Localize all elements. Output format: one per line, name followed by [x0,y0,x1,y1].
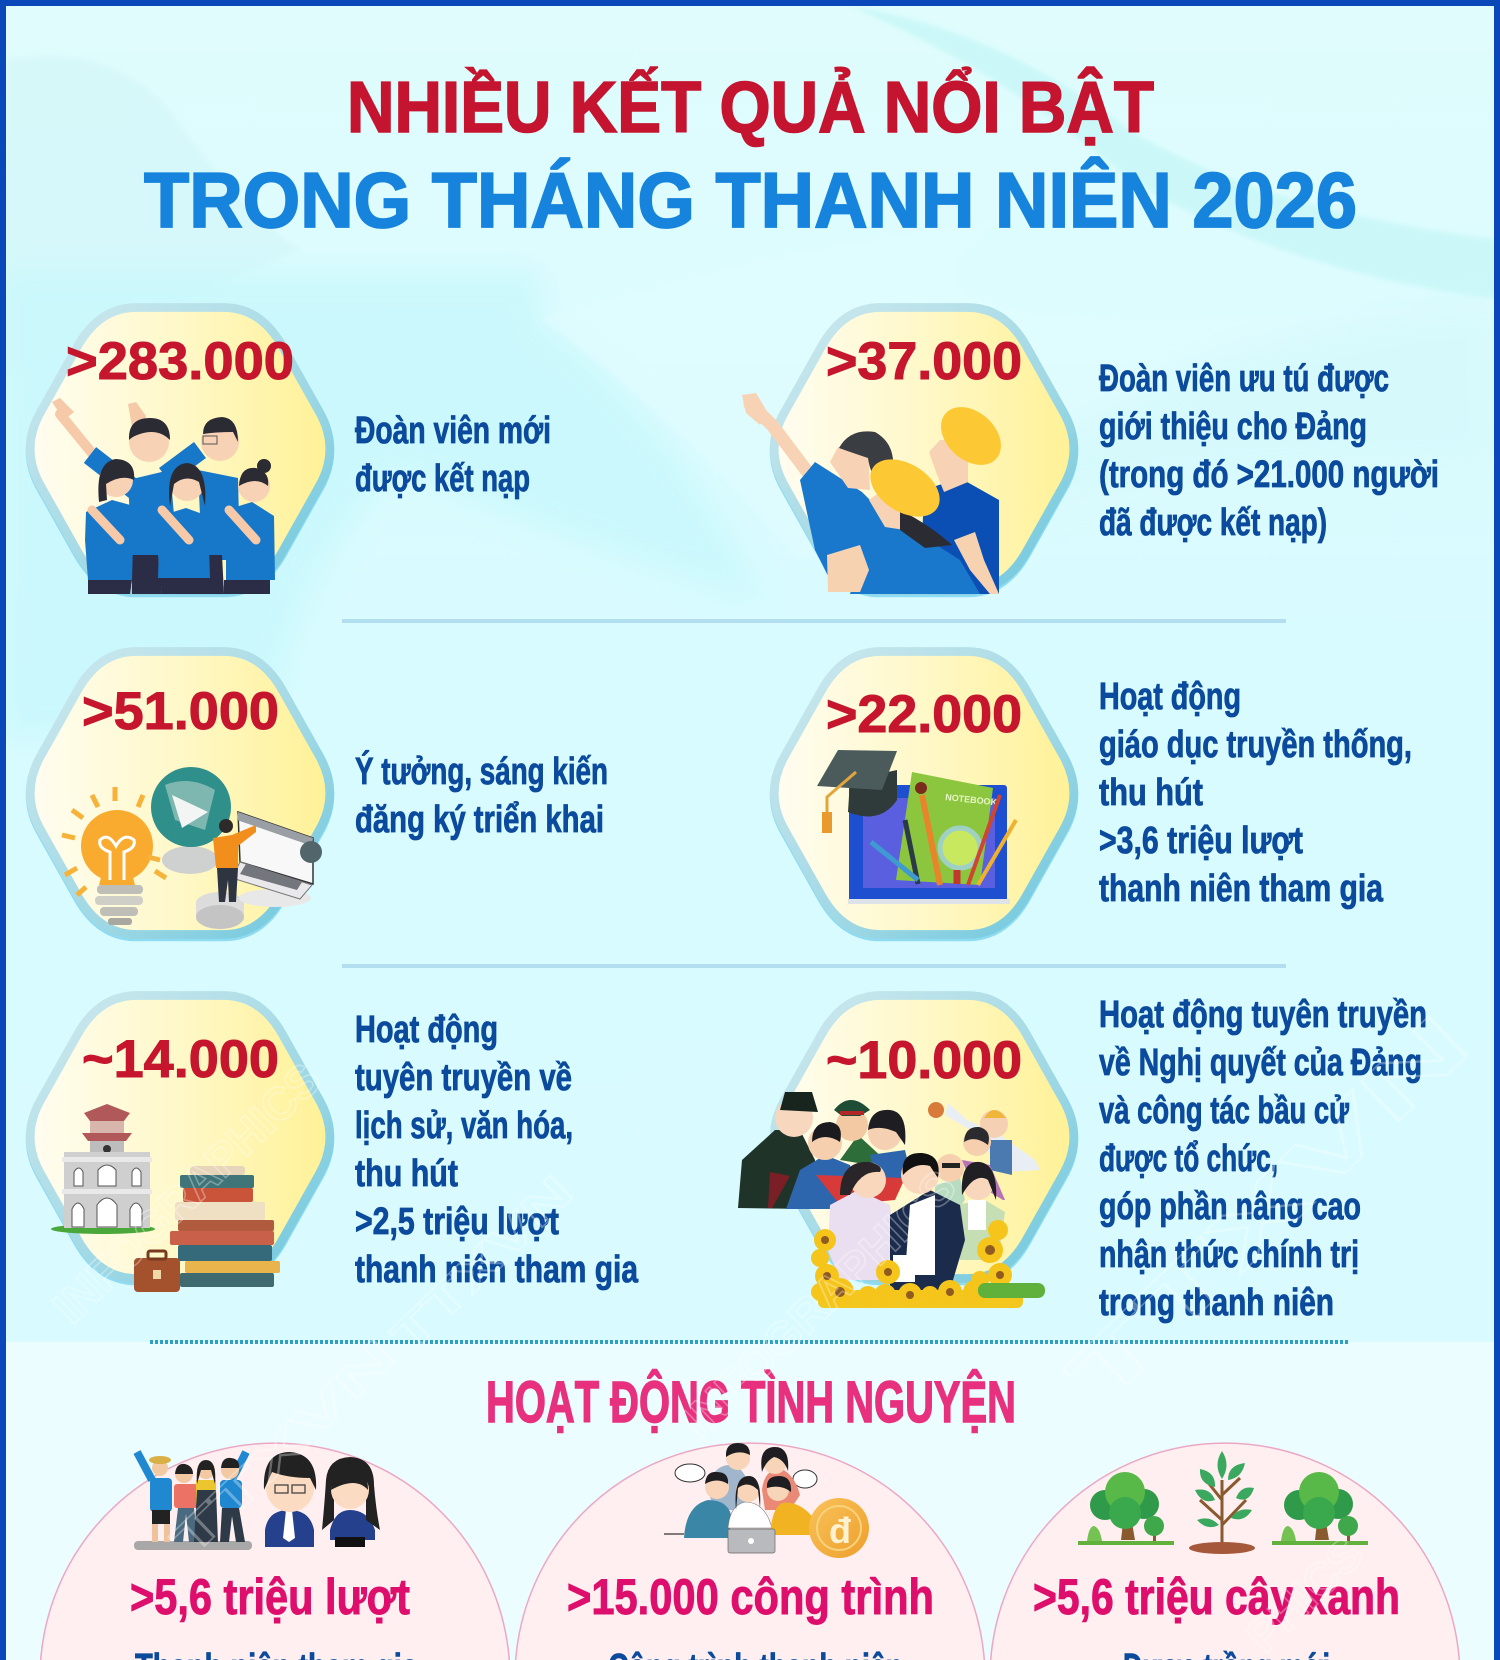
watermark: TTXVN [381,1165,582,1362]
icon: bulb, globe and laptop [62,767,322,929]
label: traditional education: >3,6 triệu lượt [1099,820,1303,862]
watermark: TTXVN [161,1328,406,1567]
label: history and culture: Hoạt động [355,1009,498,1051]
panel: new union members [30,308,551,594]
icon: team with laptop and coin [664,1443,869,1558]
dotted divider [150,1340,1349,1344]
panel: history and culture: ~14.000 [82,1030,279,1089]
watermark: PHICS [1236,1528,1373,1660]
label: history and culture: thu hút [355,1153,458,1195]
panel: traditional education [774,652,1412,937]
icon: volunteers and mascots [134,1452,380,1550]
panel: party resolution outreach [738,994,1427,1324]
label: new union members: Đoàn viên mới [355,410,551,452]
label: history and culture [355,1009,639,1291]
stat: projects: >15.000 công trình [567,1569,934,1625]
label: party resolution outreach [1099,994,1427,1324]
panel: new union members: >283.000 [66,332,294,391]
label: party resolution outreach: và công tác bầu cử [1099,1090,1349,1132]
label: traditional education [1099,676,1412,910]
icon: turtle tower [51,1104,155,1234]
label: outstanding members: đã được kết nạp) [1099,502,1327,544]
label: history and culture: lịch sử, văn hóa, [355,1105,573,1147]
label: party resolution outreach: trong thanh niên [1099,1282,1334,1324]
panel: trees planted [991,1443,1459,1660]
stat: participants: >5,6 triệu lượt [130,1569,410,1625]
panel: party resolution outreach: ~10.000 [826,1031,1022,1090]
label: new union members [355,410,551,500]
label: history and culture: thanh niên tham gia [355,1249,639,1291]
icon: team with laptop and coin: đ [829,1510,851,1551]
icon: young people group [52,398,275,594]
label: party resolution outreach: nhận thức chính trị [1099,1234,1359,1276]
label: outstanding members [1099,358,1439,544]
label: history and culture: tuyên truyền về [355,1057,572,1099]
watermark: INFOGRAPHICS [671,1160,966,1447]
label: ideas and initiatives: đăng ký triển khai [355,799,604,841]
label: outstanding members: Đoàn viên ưu tú được [1099,358,1389,400]
label: new union members: được kết nạp [355,458,530,500]
panel: traditional education: >22.000 [826,685,1022,744]
panel: ideas and initiatives [30,652,608,937]
title: TRONG THÁNG THANH NIÊN 2026 [144,156,1357,244]
icon: graduation cap and notebook: NOTEBOOK [945,792,998,807]
label: party resolution outreach: góp phần nâng cao [1099,1186,1361,1228]
panel: outstanding members: >37.000 [826,332,1022,391]
icon: stack of books and briefcase [134,1166,280,1292]
panel: youth projects [516,1443,984,1660]
icon: graduation cap and notebook [817,750,1016,904]
watermark: INFOGRAPHICS [43,1053,331,1333]
stat: trees: >5,6 triệu cây xanh [1033,1569,1400,1625]
label: party resolution outreach: được tổ chức, [1099,1138,1278,1180]
panel: volunteer participants [41,1443,509,1660]
divider 1 [342,619,1286,623]
panel: outstanding members [742,308,1439,594]
heading: volunteer activities: HOẠT ĐỘNG TÌNH NGUYỆN [486,1370,1016,1435]
watermark [43,997,1486,1660]
icon: workers looking up [742,393,1012,594]
icon: three trees [1078,1451,1368,1554]
panel: history and culture [30,996,639,1292]
label: outstanding members: giới thiệu cho Đảng [1099,406,1367,448]
divider 2 [342,964,1286,968]
label: traditional education: giáo dục truyền thống, [1099,724,1412,766]
title [144,67,1357,244]
watermark: TTXVN [1050,997,1486,1422]
panel: ideas and initiatives: >51.000 [82,682,279,741]
label: traditional education: Hoạt động [1099,676,1241,718]
label: ideas and initiatives: Ý tưởng, sáng kiến [355,749,608,793]
label: history and culture: >2,5 triệu lượt [355,1201,559,1243]
icon: crowd and sunflowers [738,1092,1045,1308]
title: NHIỀU KẾT QUẢ NỔI BẬT [347,67,1154,148]
label: traditional education: thanh niên tham gia [1099,868,1384,910]
label: traditional education: thu hút [1099,772,1203,814]
label: ideas and initiatives [355,749,608,841]
